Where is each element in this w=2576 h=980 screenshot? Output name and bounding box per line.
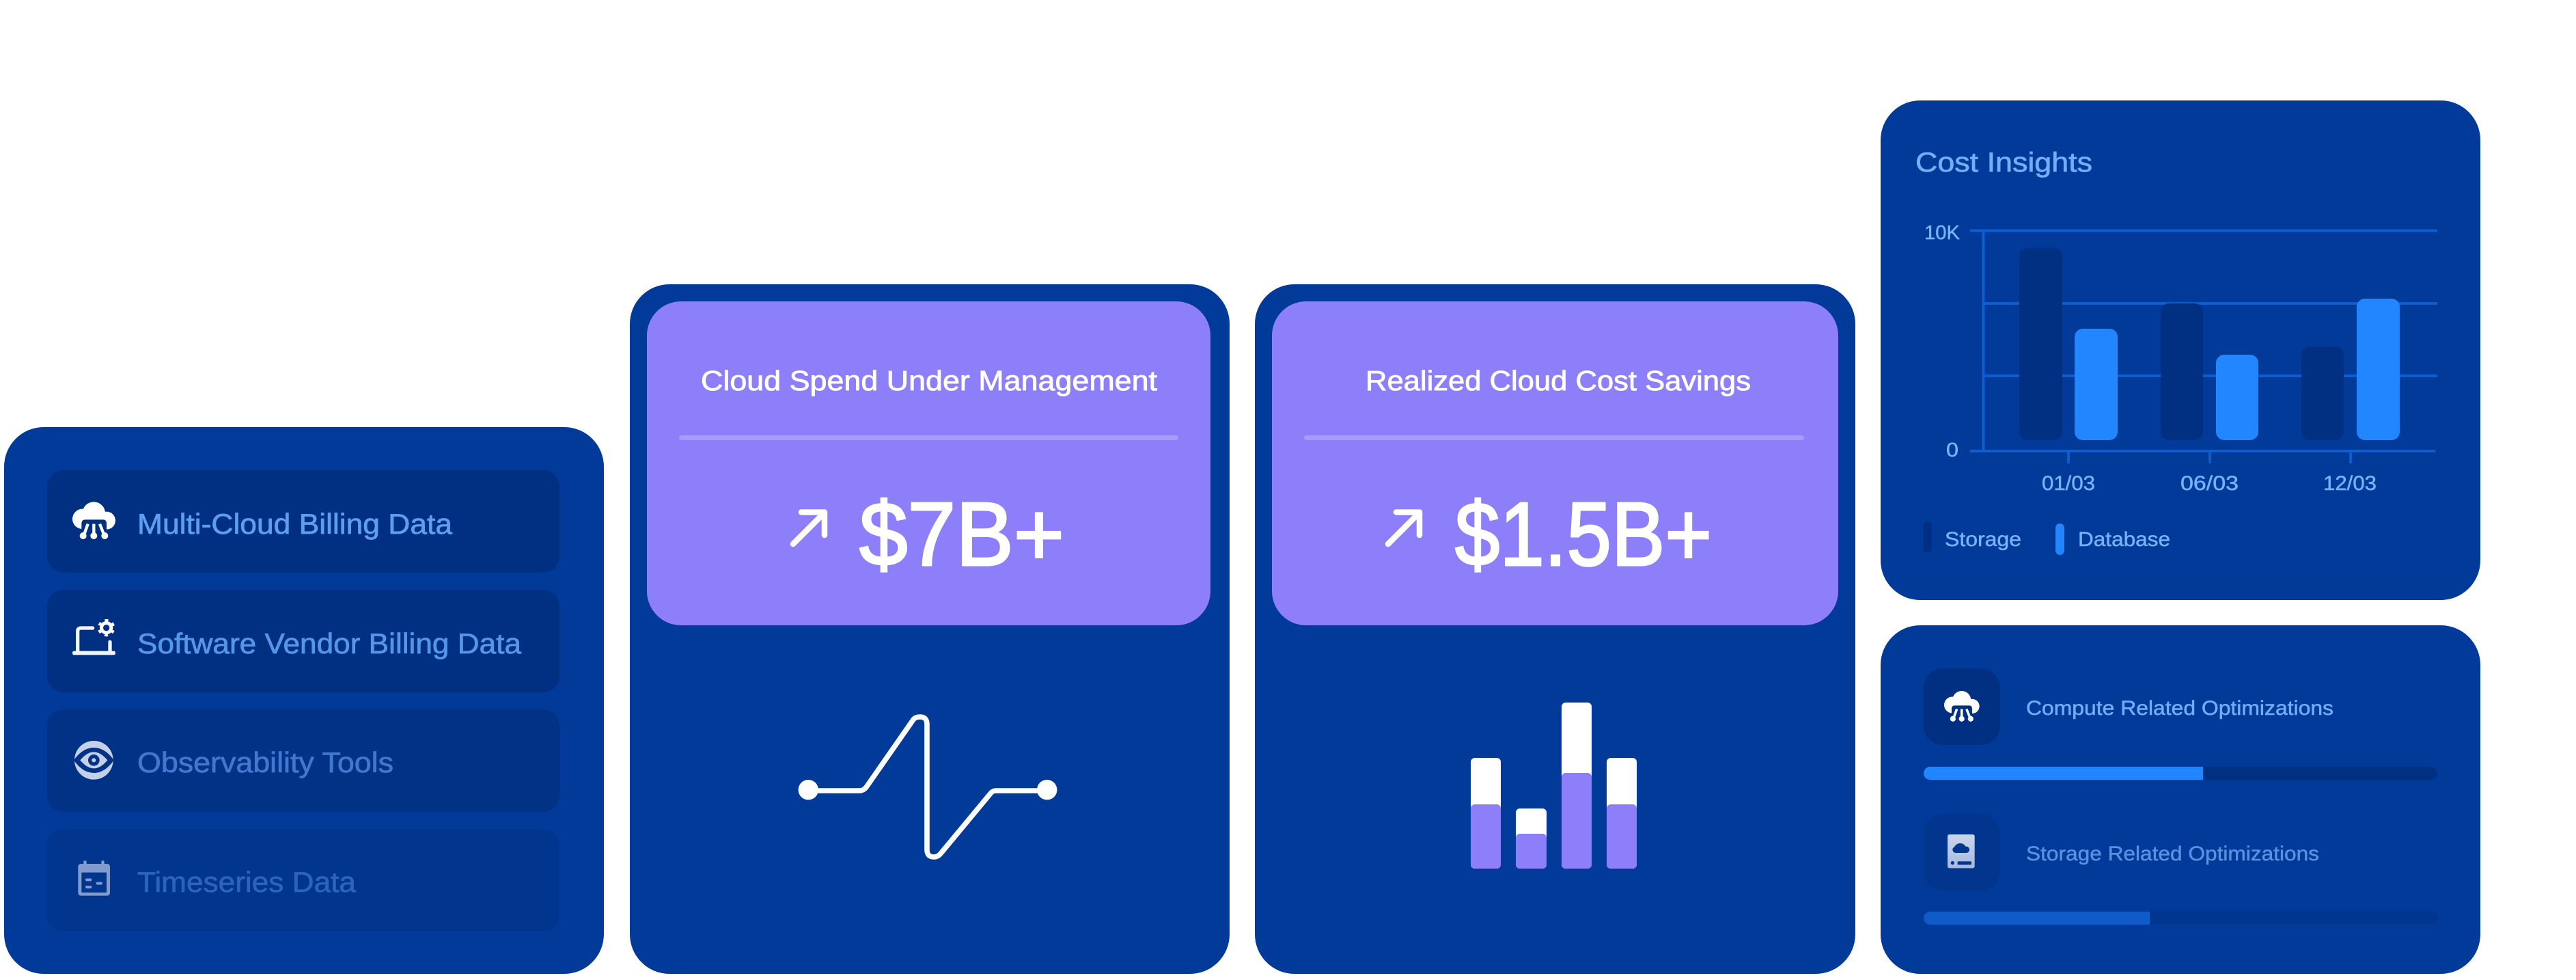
arrow	[793, 513, 825, 544]
panel: cloud spend under management	[630, 284, 1230, 974]
progress bar	[1924, 767, 2437, 780]
row: timeseries data	[47, 829, 559, 931]
stacked bar icon	[1471, 703, 1637, 869]
icon: laptop with gear	[72, 618, 117, 655]
panel: realized cloud cost savings	[1255, 284, 1855, 974]
bar chart: 10K	[1924, 222, 1961, 244]
stat card	[1272, 301, 1838, 625]
label: Storage Related Optimizations	[2026, 843, 2319, 865]
progress bar	[1924, 912, 2437, 925]
icon: storage drive	[1948, 834, 1975, 868]
arrow	[1388, 513, 1419, 544]
row: multi-cloud billing data	[47, 470, 559, 573]
value: $1.5B+	[1455, 484, 1712, 584]
panel: optimizations	[1881, 625, 2480, 974]
icon: cloud circuit	[1944, 691, 1980, 722]
stat card	[647, 301, 1210, 625]
legend: Database	[2078, 528, 2170, 551]
bar chart: 06/03	[2180, 472, 2239, 495]
bar chart: 0	[1946, 439, 1958, 461]
bar chart	[1924, 222, 2437, 495]
label: Compute Related Optimizations	[2026, 697, 2333, 720]
heading: Cloud Spend Under Management	[701, 365, 1158, 396]
bar chart: 01/03	[2042, 472, 2095, 495]
panel: cost insights	[1881, 100, 2480, 600]
legend: Storage	[1945, 528, 2021, 551]
heading: Cost Insights	[1915, 148, 2092, 178]
icon: eye	[74, 741, 114, 780]
panel: data sources	[4, 427, 604, 974]
line chart icon	[799, 717, 1057, 857]
row: observability tools	[47, 709, 559, 812]
legend	[1923, 521, 2170, 555]
row: software vendor billing data	[47, 590, 559, 692]
label: Software Vendor Billing Data	[137, 627, 522, 659]
label: Observability Tools	[137, 746, 393, 778]
value: $7B+	[859, 484, 1064, 584]
label: Multi-Cloud Billing Data	[137, 508, 453, 540]
bar chart: 12/03	[2323, 472, 2377, 495]
item: storage related optimizations	[1924, 814, 2437, 925]
icon: calendar	[78, 860, 110, 896]
label: Timeseries Data	[137, 866, 357, 898]
heading: Realized Cloud Cost Savings	[1366, 365, 1751, 396]
icon: cloud circuit	[72, 502, 115, 540]
item: compute related optimizations	[1924, 668, 2437, 780]
